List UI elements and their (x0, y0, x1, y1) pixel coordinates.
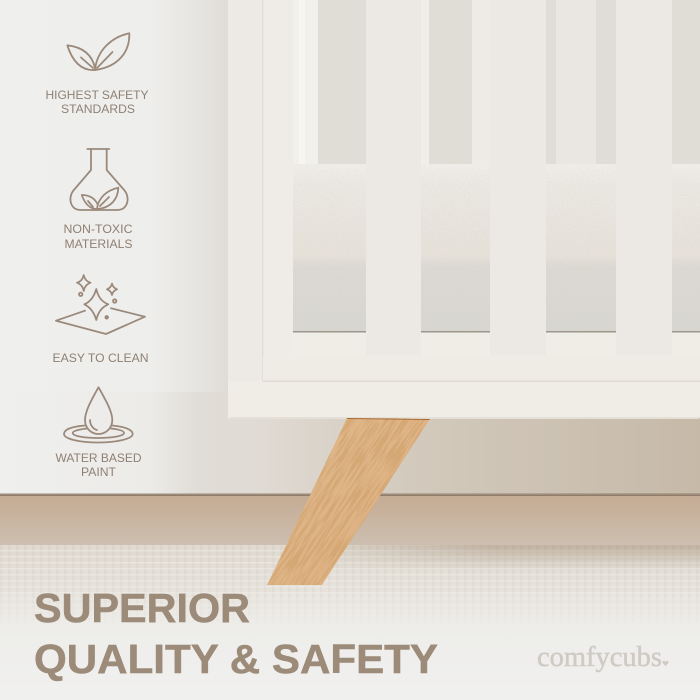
rug (0, 545, 700, 619)
feature: non-toxic materials: MATERIALS (64, 237, 133, 251)
crib bottom rail (228, 355, 700, 419)
feature: water based paint: PAINT (81, 465, 116, 479)
feature: water based paint (56, 387, 142, 479)
feature: easy to clean (52, 275, 148, 365)
feature: highest safety standards (46, 33, 149, 116)
crib background window between slats (293, 0, 700, 165)
feature: highest safety standards: STANDARDS (61, 102, 135, 116)
wood floor (0, 494, 700, 546)
crib slat 3 (616, 0, 672, 356)
text: highest safety standards: HIGHEST SAFETY (46, 88, 149, 102)
icon: sparkling surface (56, 275, 145, 334)
crib lower panel band (293, 332, 700, 356)
wooden crib leg (267, 418, 430, 585)
crib slat 1 (366, 0, 421, 356)
mattress (293, 164, 700, 332)
icon: water drop with ripples (64, 387, 133, 442)
title (34, 585, 438, 682)
lower wall and baseboard (0, 392, 700, 494)
icon: leaves (67, 33, 129, 70)
crib corner posts (228, 0, 293, 392)
text: non-toxic materials: NON-TOXIC (64, 222, 133, 236)
title: SUPERIOR (34, 585, 250, 631)
text: water based paint: WATER BASED (56, 451, 142, 465)
title: QUALITY & SAFETY (34, 636, 438, 682)
left wall panel (0, 0, 232, 392)
feature: non-toxic materials (64, 149, 133, 251)
logo: comfycubs: comfycubs (537, 642, 662, 673)
crib slat 2 (490, 0, 546, 356)
icon: flask with leaves (70, 149, 128, 210)
text: easy to clean: EASY TO CLEAN (52, 351, 148, 365)
